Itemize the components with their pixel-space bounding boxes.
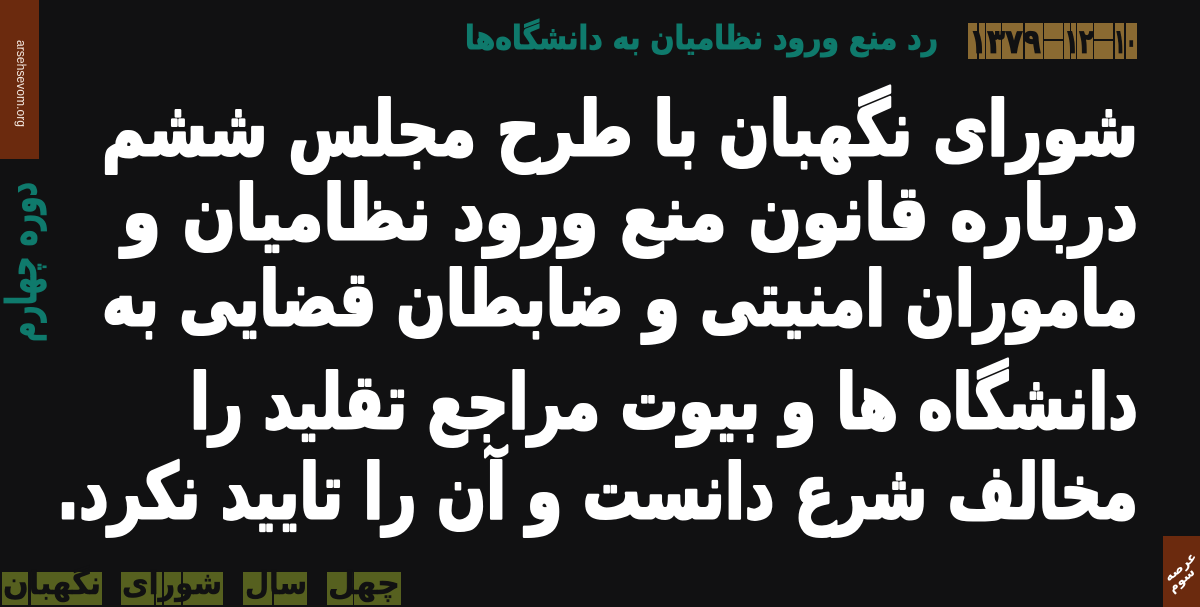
footer title badge [2, 564, 401, 605]
footer title badge: سال [245, 564, 307, 602]
panel: website tab [0, 0, 39, 159]
date badge [968, 22, 1137, 62]
date badge: ۱۳۷۹ [969, 22, 1041, 62]
footer title badge: چهل [328, 564, 400, 602]
panel: logo [1162, 536, 1200, 607]
panel: website tab: arsehsevom.org [14, 40, 29, 127]
panel: logo: عرصه [1162, 550, 1200, 585]
main statement [57, 84, 1138, 537]
date badge: ۱۲ [1064, 22, 1094, 62]
panel: logo: سوم [1165, 565, 1198, 596]
heading: subtitle: رد منع ورود نظامیان به دانشگاه‌ها [465, 18, 938, 58]
footer title badge: نگهبان [3, 564, 101, 602]
date badge: ۱۰ [1114, 22, 1137, 62]
footer title badge: شورای [122, 564, 222, 602]
